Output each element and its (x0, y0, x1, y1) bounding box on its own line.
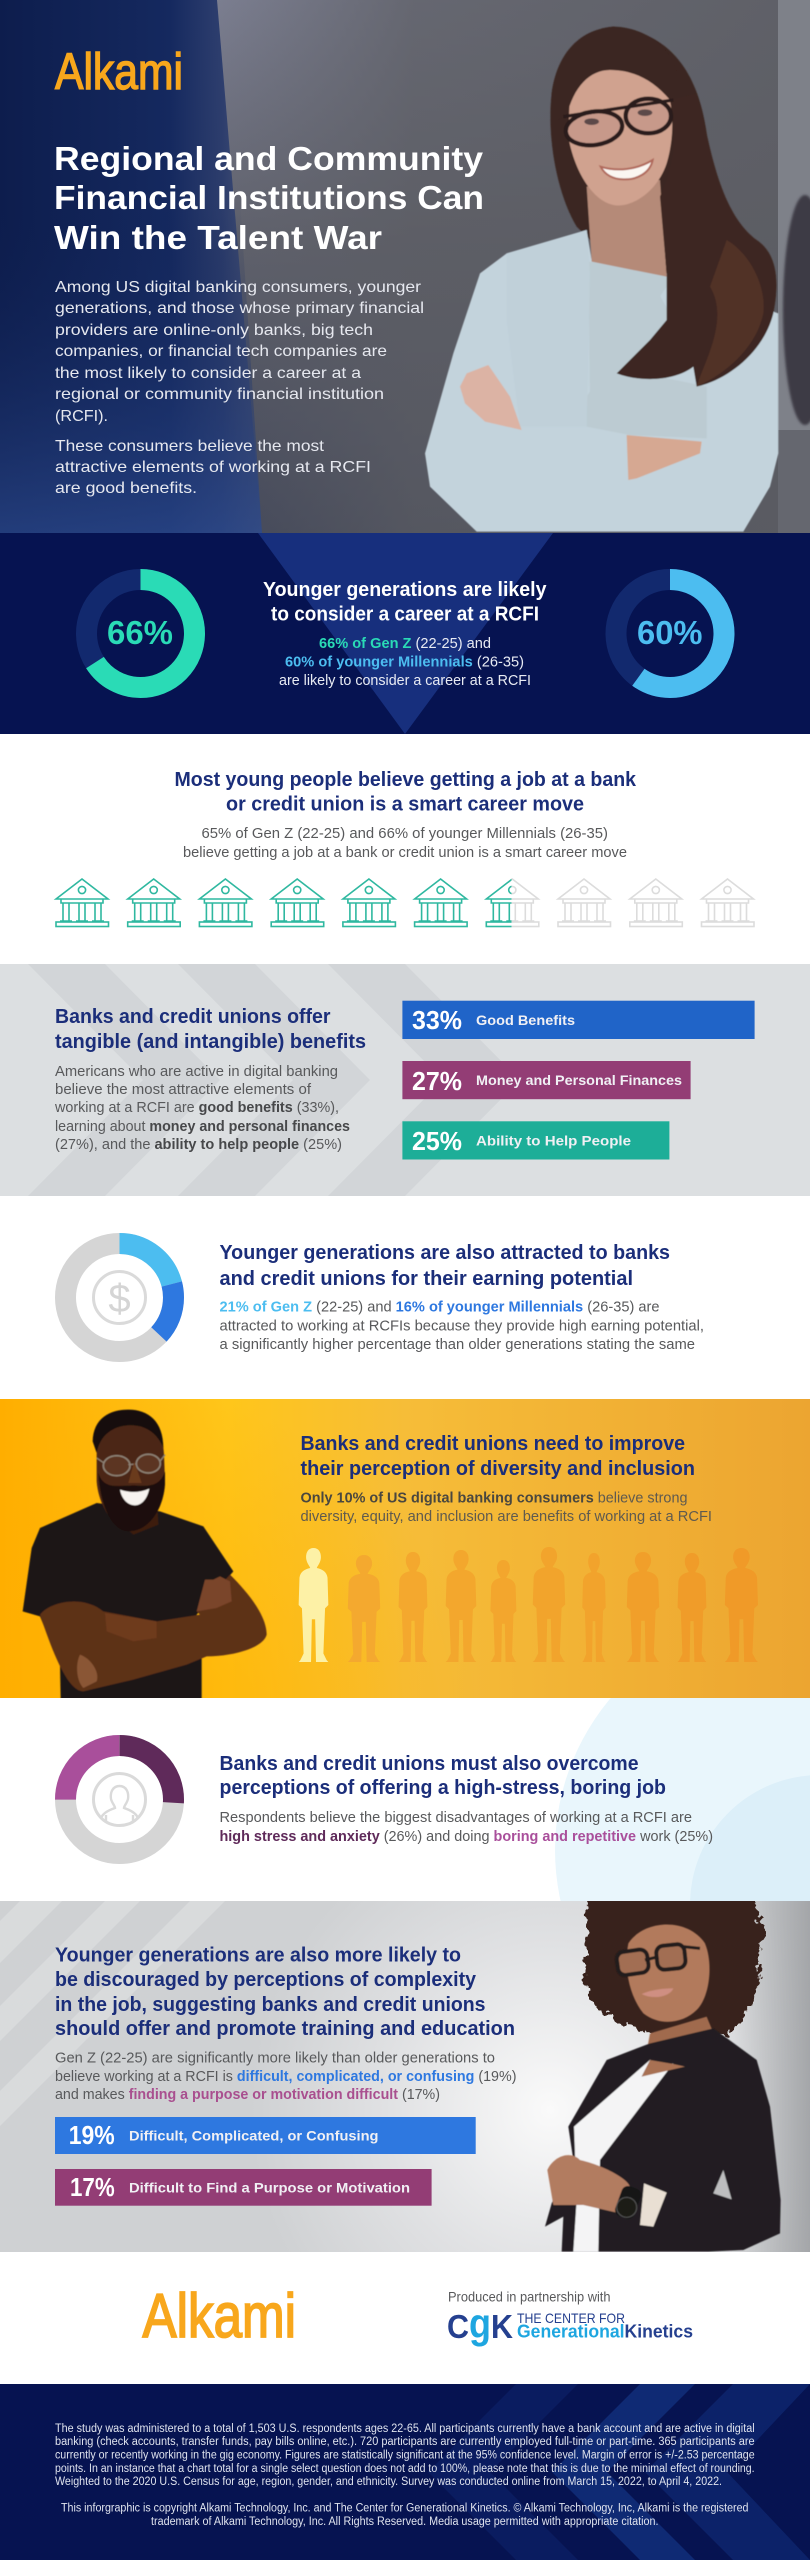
heading: Banks and credit unions offer (55, 1005, 331, 1028)
bar: money and personal finances 27% (402, 1061, 691, 1099)
bar: money and personal finances 27%: 27% (412, 1066, 462, 1096)
logo: Alkami: Alkami (55, 43, 183, 100)
logo: Center for Generational Kinetics: g (469, 2300, 491, 2347)
heading (300, 1432, 695, 1480)
description (183, 826, 627, 861)
donut: 60%: 60% (637, 614, 702, 651)
description: a significantly higher percentage than older generations stating the same (220, 1337, 695, 1353)
panel: complexity and training (0, 1893, 810, 2252)
heading: Younger generations are also attracted to banks (220, 1241, 670, 1264)
bar: purpose 17% (55, 2169, 432, 2206)
bar: purpose 17%: 17% (70, 2172, 115, 2202)
description: 21% of Gen Z (22-25) and 16% of younger Millennials (26-35) are (220, 1300, 660, 1316)
description (220, 1810, 713, 1845)
description: Only 10% of US digital banking consumers believe strong (300, 1490, 688, 1506)
description: attracted to working at RCFIs because they provide high earning potential, (220, 1318, 704, 1334)
panel: logos (0, 2252, 810, 2384)
description: high stress and anxiety (26%) and doing boring and repetitive work (25%) (220, 1829, 713, 1845)
intro text: Among US digital banking consumers, younger (55, 279, 422, 296)
heading: in the job, suggesting banks and credit unions (55, 1993, 486, 2016)
methodology text: banking (check accounts, transfer funds, pay bills online, etc.). 720 participants are currently employed full-time or part-time. 365 participants are (55, 2436, 755, 2448)
heading: Younger generations are likely (263, 578, 547, 601)
intro text: providers are online-only banks, big tech (55, 322, 373, 339)
bar: purpose 17%: Difficult to Find a Purpose or Motivation (129, 2180, 410, 2196)
description: believe the most attractive elements of (55, 1082, 312, 1098)
methodology text: currently or recently working in the gig economy. Figures are statistically significant at the 95% confidence level. Margin of error is +/-2.53 percentage (55, 2450, 755, 2462)
description: Americans who are active in digital banking (55, 1064, 338, 1080)
description: believe getting a job at a bank or credit union is a smart career move (183, 845, 627, 861)
heading: and credit unions for their earning potential (220, 1267, 633, 1290)
description (54, 1064, 350, 1153)
pictogram: bank icons 65% (56, 879, 754, 926)
methodology text: points. In an instance that a chart total for a single select question does not add to 100%, please note that this is due to the minimal effect of rounding. (55, 2463, 755, 2475)
logo: Center for Generational Kinetics: GenerationalKinetics (517, 2322, 693, 2342)
bar: ability to help people 25%: 25% (412, 1126, 462, 1156)
heading (55, 1944, 515, 2040)
donut: earning potential: $ (108, 1277, 131, 1321)
donut: 66% (86, 580, 194, 688)
panel: smart career move (54, 771, 756, 928)
donut: 60% (616, 580, 724, 688)
bar: difficult 19%: Difficult, Complicated, or Confusing (129, 2128, 378, 2144)
bar: money and personal finances 27%: Money and Personal Finances (476, 1072, 682, 1088)
description: believe working at a RCFI is difficult, complicated, or confusing (19%) (55, 2069, 516, 2085)
heading: to consider a career at a RCFI (271, 602, 539, 626)
methodology text: Weighted to the 2020 U.S. Census for age, region, gender, and ethnicity. Survey was conducted online from March 15, 2022, to April 4, 2022. (55, 2476, 722, 2488)
intro text: are good benefits. (55, 480, 197, 497)
description (279, 636, 531, 689)
intro text (55, 279, 424, 497)
bar: ability to help people 25% (402, 1121, 669, 1160)
heading (55, 1005, 366, 1053)
panel: high-stress boring job (55, 1698, 810, 1901)
description: 60% of younger Millennials (26-35) (285, 654, 524, 670)
title: Win the Talent War (54, 219, 382, 256)
heading: Banks and credit unions must also overcome (220, 1752, 638, 1775)
description: learning about money and personal finances (55, 1119, 350, 1135)
description (300, 1490, 712, 1525)
bar: good benefits 33%: 33% (412, 1005, 462, 1035)
panel: diversity and inclusion (0, 1399, 810, 1700)
heading: or credit union is a smart career move (226, 792, 584, 816)
bar: good benefits 33%: Good Benefits (476, 1012, 575, 1028)
description: 66% of Gen Z (22-25) and (319, 636, 491, 652)
heading: tangible (and intangible) benefits (55, 1030, 366, 1053)
description: Respondents believe the biggest disadvantages of working at a RCFI are (220, 1810, 692, 1826)
panel: tangible benefits (0, 964, 810, 1196)
logo: Center for Generational Kinetics: THE CENTER FOR (517, 2310, 625, 2326)
title (54, 146, 483, 250)
donut: disadvantages (66, 1746, 174, 1854)
description: diversity, equity, and inclusion are benefits of working at a RCFI (300, 1509, 712, 1525)
methodology text: The study was administered to a total of 1,503 U.S. respondents ages 22-65. All participants currently have a bank account and are active in digital (55, 2423, 755, 2435)
methodology text (55, 2423, 755, 2488)
heading: Most young people believe getting a job at a bank (174, 768, 637, 791)
panel: hero (0, 0, 810, 533)
intro text: the most likely to consider a career at a (55, 365, 361, 382)
description (220, 1300, 704, 1353)
panel: footer (0, 2384, 810, 2560)
logo: Center for Generational Kinetics (447, 2300, 693, 2347)
intro text: These consumers believe the most (55, 438, 325, 455)
heading: Younger generations are also more likely to (55, 1944, 461, 1966)
intro text: (RCFI). (55, 408, 108, 425)
hero background (0, 0, 810, 533)
intro text: attractive elements of working at a RCFI (55, 459, 371, 476)
intro text: regional or community financial institution (55, 386, 384, 403)
heading (220, 1241, 670, 1290)
description: and makes finding a purpose or motivation difficult (17%) (55, 2087, 440, 2103)
heading (220, 1752, 666, 1799)
donut: 66%: 66% (107, 614, 173, 651)
bar: good benefits 33% (402, 1001, 755, 1039)
bar: difficult 19% (55, 2117, 476, 2154)
heading: be discouraged by perceptions of complexity (55, 1968, 477, 1991)
heading (263, 578, 547, 626)
description (55, 2050, 516, 2103)
copyright text: trademark of Alkami Technology, Inc. All Rights Reserved. Media usage permitted with appropriate citation. (151, 2516, 658, 2528)
panel: younger generations likely (0, 533, 810, 734)
heading: should offer and promote training and education (55, 2017, 515, 2040)
copyright text (61, 2502, 748, 2528)
description: Gen Z (22-25) are significantly more likely than older generations to (55, 2050, 495, 2066)
intro text: generations, and those whose primary financial (55, 300, 424, 317)
heading (174, 768, 637, 816)
intro text: companies, or financial tech companies are (55, 343, 387, 360)
photo: woman in black blazer (545, 1893, 781, 2252)
partnership label: Produced in partnership with (448, 2288, 610, 2304)
pictogram: ten people, one highlighted (299, 1547, 758, 1662)
title: Financial Institutions Can (54, 179, 484, 216)
description: working at a RCFI are good benefits (33%), (54, 1100, 339, 1116)
heading: Banks and credit unions need to improve (300, 1432, 685, 1455)
donut: earning potential (66, 1244, 174, 1352)
bar: ability to help people 25%: Ability to Help People (476, 1132, 631, 1148)
description: are likely to consider a career at a RCFI (279, 673, 531, 689)
logo: Center for Generational Kinetics: K (491, 2308, 513, 2345)
photo: smiling man with crossed arms (23, 1410, 267, 1700)
copyright text: This inforgraphic is copyright Alkami Technology, Inc. and The Center for Generational Kinetics. © Alkami Technology, Inc, Alkami is the registered (61, 2502, 748, 2514)
logo: Alkami: Alkami (142, 2282, 296, 2351)
heading: their perception of diversity and inclusion (300, 1457, 695, 1480)
photo: smiling woman with glasses (425, 27, 778, 532)
description: 65% of Gen Z (22-25) and 66% of younger Millennials (26-35) (202, 826, 608, 842)
bar: difficult 19%: 19% (69, 2120, 115, 2150)
title: Regional and Community (54, 140, 484, 177)
logo: Center for Generational Kinetics: C (447, 2308, 469, 2345)
description: (27%), and the ability to help people (25%) (55, 1137, 342, 1153)
heading: perceptions of offering a high-stress, boring job (220, 1776, 666, 1799)
panel: earning potential (0, 1196, 810, 1399)
